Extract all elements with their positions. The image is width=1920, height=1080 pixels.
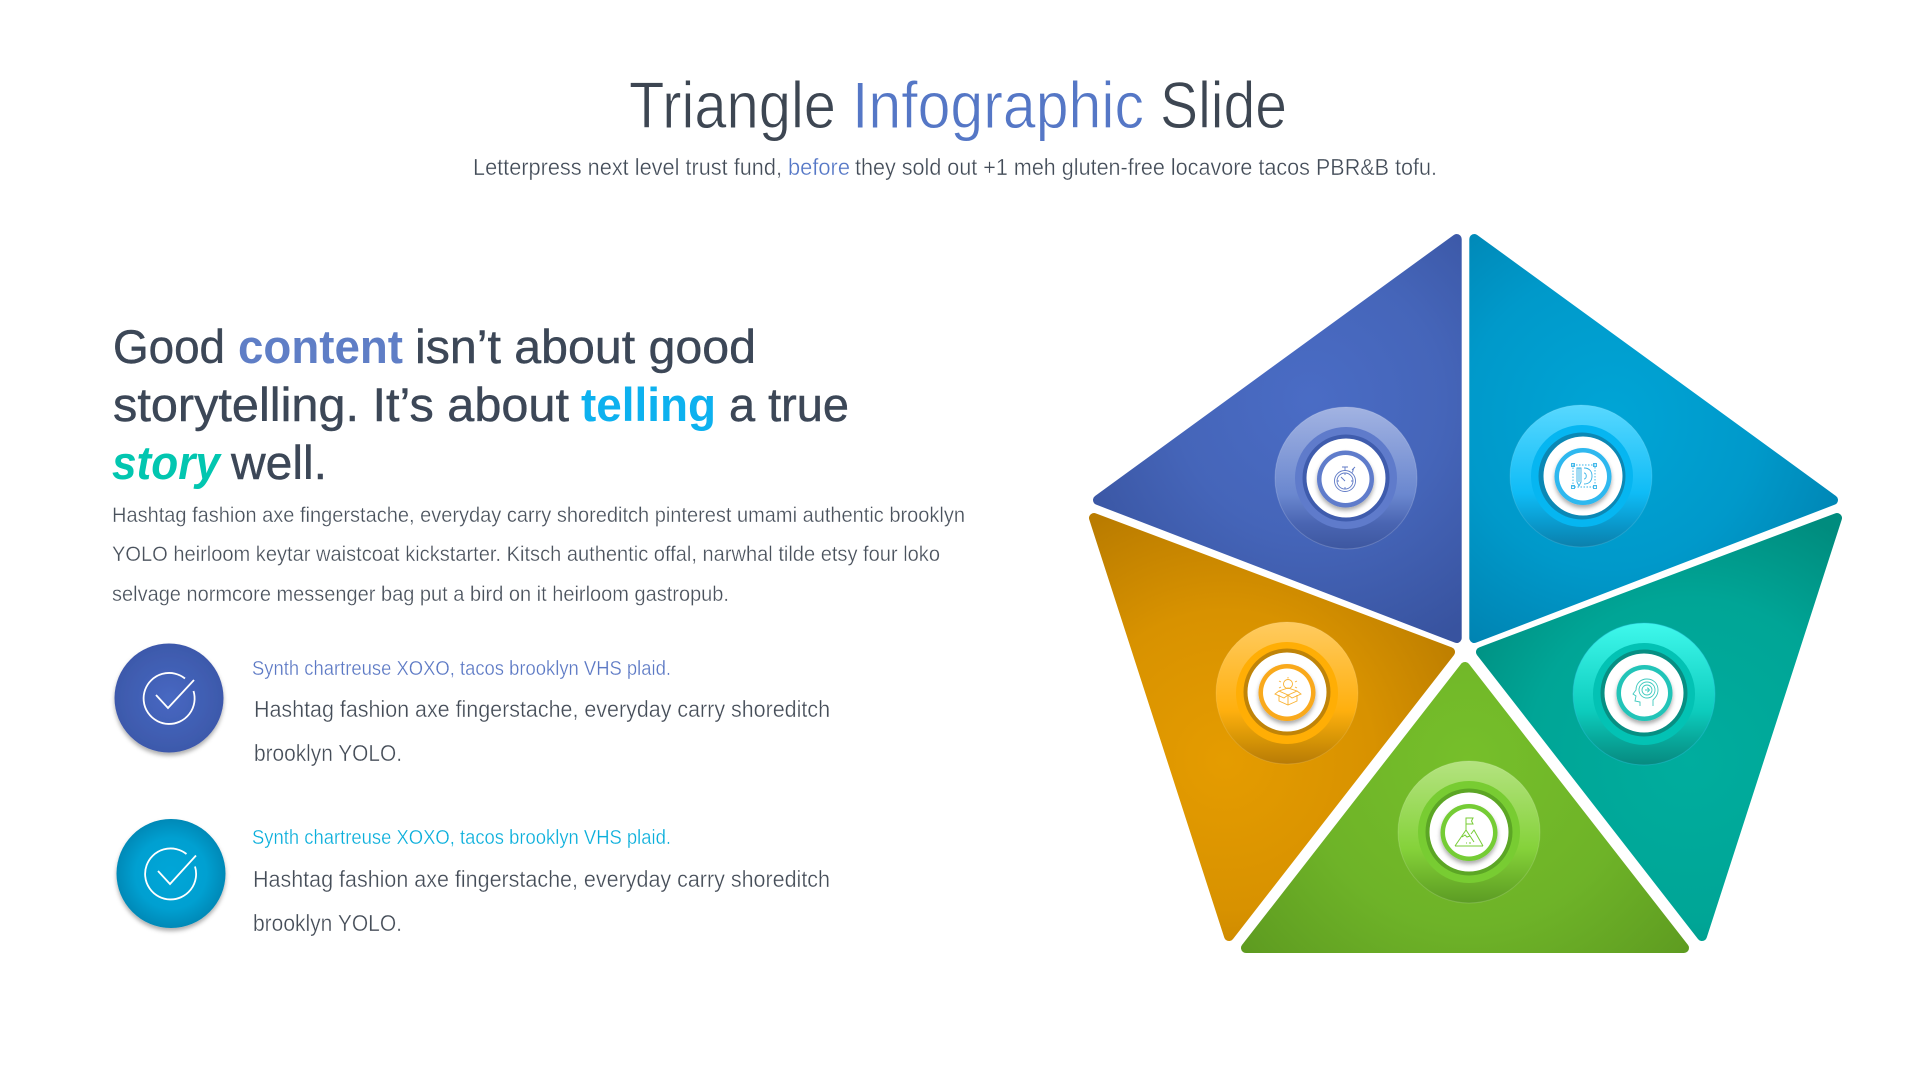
subtitle: Letterpress next level trust fund, (473, 154, 782, 180)
segment: cyan (1474, 239, 1833, 638)
headline: well. (230, 436, 327, 489)
list item 1 text: Synth chartreuse XOXO, tacos brooklyn VHS plaid. (252, 657, 671, 680)
icon: mountain with flag (1455, 818, 1483, 846)
title: Triangle (629, 68, 836, 142)
paragraph: selvage normcore messenger bag put a bird on it heirloom gastropub. (112, 583, 729, 606)
list item 1 text: Hashtag fashion axe fingerstache, everyday carry shoreditch (254, 696, 830, 722)
segment: blue (1098, 239, 1457, 638)
subtitle: they sold out +1 meh gluten-free locavore tacos PBR&B tofu. (855, 154, 1437, 180)
headline: Good (113, 320, 225, 373)
icon: idea box (1275, 677, 1301, 705)
headline: a true (729, 378, 849, 431)
title (629, 68, 1287, 142)
list item 2 text (252, 826, 830, 936)
headline (112, 320, 849, 489)
paragraph (112, 504, 965, 606)
list item 1 text (252, 657, 830, 766)
paragraph: YOLO heirloom keytar waistcoat kickstarter. Kitsch authentic offal, narwhal tilde etsy four loko (112, 543, 940, 566)
subtitle: before (788, 154, 850, 180)
title: Slide (1160, 68, 1287, 142)
headline: telling (581, 378, 716, 431)
segment: teal (1481, 518, 1837, 936)
icon: stopwatch (1334, 467, 1356, 492)
icon: pencil and gear (1572, 464, 1596, 488)
headline: story (112, 436, 223, 489)
subtitle (473, 154, 1437, 180)
icon: cyan check badge (116, 819, 226, 928)
paragraph: Hashtag fashion axe fingerstache, everyday carry shoreditch pinterest umami authentic brooklyn (112, 504, 965, 527)
segment: green (1246, 667, 1684, 948)
segment: orange (1094, 518, 1450, 936)
title: Infographic (852, 68, 1144, 142)
list item 2 text: brooklyn YOLO. (253, 910, 402, 936)
pentagon chart (1094, 239, 1837, 948)
list item 2 text: Synth chartreuse XOXO, tacos brooklyn VHS plaid. (252, 826, 671, 849)
list item 2 text: Hashtag fashion axe fingerstache, everyday carry shoreditch (253, 866, 830, 892)
headline: storytelling. It’s about (113, 378, 569, 431)
list item 1 text: brooklyn YOLO. (254, 740, 402, 766)
headline: content (238, 320, 403, 373)
headline: isn’t about good (415, 320, 756, 373)
icon: head with maze (1633, 679, 1658, 706)
icon: blue check badge (114, 644, 224, 752)
